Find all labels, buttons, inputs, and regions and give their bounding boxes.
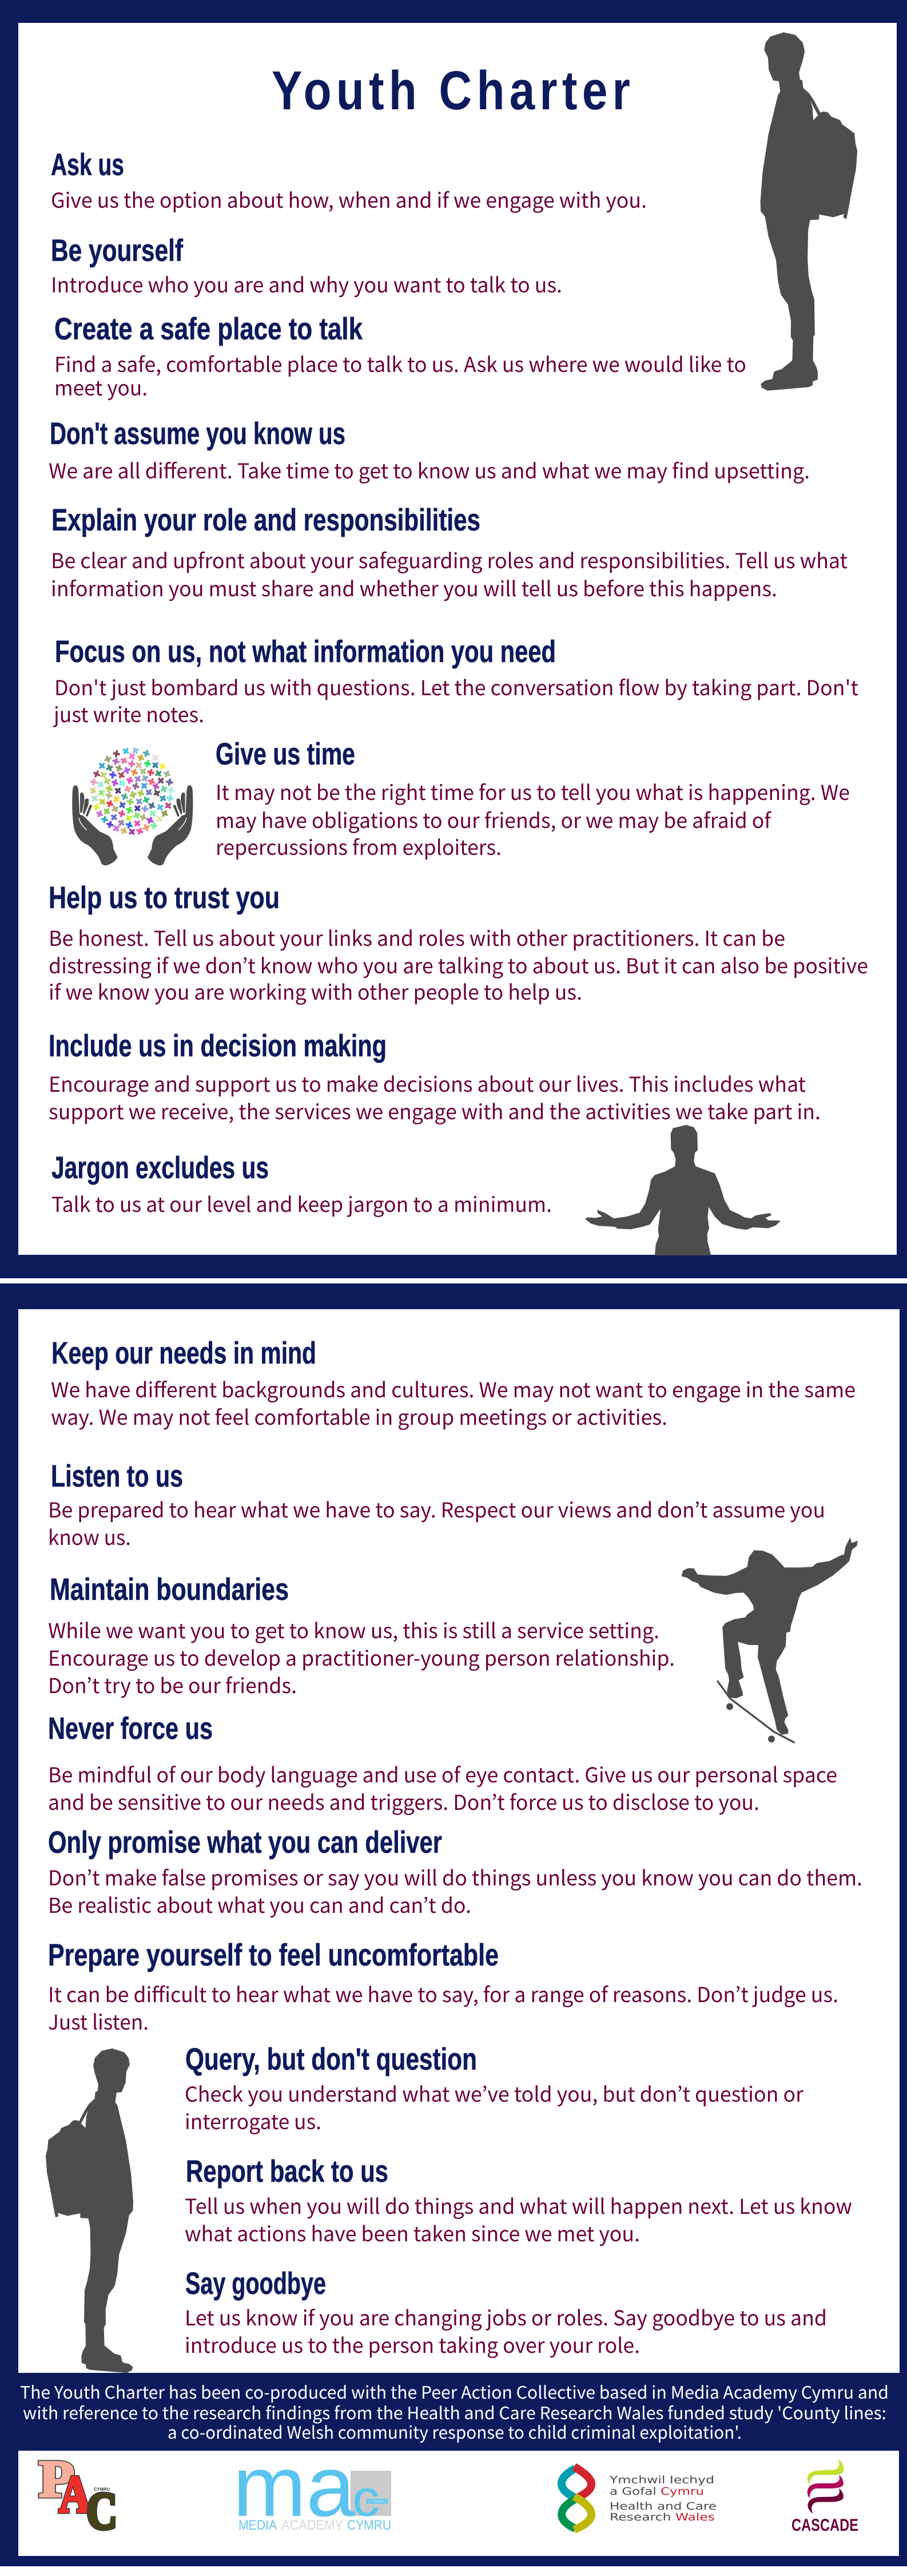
section: Be yourself [51,233,562,299]
logo: Media Academy Cymru: c [352,2470,380,2527]
logo: Media Academy Cymru: CYMRU [368,2499,387,2504]
section: Don't assume you know us: Don't assume you know us [50,417,345,451]
section: Maintain boundaries: Encourage us to develop a practitioner-young person relationship. [48,1642,675,1672]
section: Only promise what you can deliver: Only promise what you can deliver [48,1825,442,1860]
section: Give us time: It may not be the right time for us to tell you what is happening. We [216,776,850,806]
section: Listen to us [48,1459,825,1551]
section: Prepare yourself to feel uncomfortable: Prepare yourself to feel uncomfortable [48,1938,499,1972]
logo: CASCADE: CASCADE [791,2516,858,2535]
section: Be yourself: Introduce who you are and why you want to talk to us. [51,269,562,299]
section: Help us to trust you: if we know you are working with other people to help us. [49,976,582,1006]
footer credit text: a co-ordinated Welsh community response to child criminal exploitation'. [168,2419,742,2444]
section: Say goodbye: Say goodbye [185,2266,326,2301]
section: Query, but don't question: Check you understand what we’ve told you, but don’t question or [185,2078,804,2108]
section: Explain your role and responsibilities [51,503,848,603]
section: Keep our needs in mind [51,1336,856,1431]
section: Maintain boundaries: While we want you to get to know us, this is still a service setting. [48,1615,659,1644]
logo: Health and Care Research Wales: Health and Care [610,2500,717,2512]
icon: skateboarder silhouette [682,1537,858,1742]
logo: PAC Cymru: P [39,2450,74,2508]
section: Create a safe place to talk [54,312,746,402]
logo: PAC Cymru: C [86,2482,117,2540]
section: Ask us: Ask us [51,148,124,182]
section: Never force us: and be sensitive to our needs and triggers. Don’t force us to disclose to you. [48,1786,759,1816]
logo: Health and Care Research Wales: a Gofal Cymru [610,2486,704,2498]
section: Maintain boundaries: Maintain boundaries [50,1572,289,1607]
section: Listen to us: Listen to us [51,1459,183,1493]
section: Say goodbye [185,2266,827,2359]
section: Prepare yourself to feel uncomfortable: It can be difficult to hear what we have to say, for a range of reasons. Don’t judge us. [48,1979,838,2008]
section: Report back to us [185,2154,852,2248]
section: Never force us: Be mindful of our body language and use of eye contact. Give us our personal space [48,1759,837,1789]
icon: person with open arms silhouette [585,1125,781,1255]
section: Say goodbye: introduce us to the person taking over your role. [185,2329,640,2359]
section: Include us in decision making: Include us in decision making [49,1029,387,1063]
icon: student with backpack silhouette, facing right [46,2048,133,2373]
section: Only promise what you can deliver: Don’t make false promises or say you will do things unless you know you can do them. [48,1862,862,1892]
section: Give us time: Give us time [216,737,355,771]
section: Report back to us: what actions have been taken since we met you. [185,2218,640,2248]
section: Focus on us, not what information you need [53,635,858,728]
section: Say goodbye: Let us know if you are changing jobs or roles. Say goodbye to us and [185,2302,827,2332]
section: Help us to trust you: Help us to trust you [49,881,280,915]
title: Youth Charter [272,60,635,121]
section: Don't assume you know us: We are all different. Take time to get to know us and what we may find upsetting. [49,455,810,485]
logo: CASCADE [791,2459,858,2535]
section: Maintain boundaries: Don’t try to be our friends. [48,1670,297,1699]
section: Be yourself: Be yourself [51,233,184,268]
section: Focus on us, not what information you need: Focus on us, not what information you need [55,635,556,669]
section: Give us time: may have obligations to our friends, or we may be afraid of [216,804,771,834]
section: Give us time [216,737,850,861]
section: Jargon excludes us: Talk to us at our level and keep jargon to a minimum. [51,1188,552,1218]
section: Give us time: repercussions from exploiters. [216,831,502,861]
panel: page two frame [0,1283,907,2566]
section: Maintain boundaries [48,1572,675,1699]
section: Never force us [48,1711,837,1816]
section: Keep our needs in mind: Keep our needs in mind [51,1336,316,1370]
section: Help us to trust you: distressing if we don’t know who you are talking to about us. But it can also be positive [49,950,868,980]
section: Listen to us: know us. [48,1521,131,1551]
section: Explain your role and responsibilities: Explain your role and responsibilities [51,503,480,537]
logo: Health and Care Research Wales: Research Wales [610,2511,715,2523]
section: Create a safe place to talk: meet you. [54,372,148,402]
section: Ask us [51,148,647,214]
section: Focus on us, not what information you need: just write notes. [53,699,204,728]
logo: Health and Care Research Wales [562,2467,717,2530]
footer credit text: with reference to the research findings from the Health and Care Research Wales funded study 'County lines: [23,2399,886,2424]
icon: hands holding puzzle globe [72,747,193,865]
footer credit text [20,2379,889,2444]
logo: PAC Cymru: C [86,2482,117,2540]
section: Prepare yourself to feel uncomfortable: Just listen. [48,2006,149,2036]
logo: PAC Cymru: P [39,2450,74,2508]
section: Help us to trust you: Be honest. Tell us about your links and roles with other practitioners. It can be [49,922,785,952]
logo: PAC Cymru [39,2450,117,2540]
section: Help us to trust you [49,881,868,1006]
logo: Media Academy Cymru: CYMRU [347,2518,391,2533]
section: Jargon excludes us [51,1151,552,1218]
section: Include us in decision making [49,1029,821,1125]
logo: PAC Cymru: A [59,2465,91,2523]
logo: PAC Cymru: CYMRU [94,2487,110,2492]
section: Keep our needs in mind: way. We may not feel comfortable in group meetings or activities. [51,1401,667,1431]
logo: Health and Care Research Wales: Ymchwil Iechyd [609,2474,714,2486]
section: Report back to us: Tell us when you will do things and what will happen next. Let us know [185,2190,852,2220]
logo: Media Academy Cymru: ma [233,2438,356,2534]
section: Report back to us: Report back to us [186,2154,388,2189]
section: Include us in decision making: Encourage and support us to make decisions about our lives. This includes what [49,1068,806,1098]
section: Include us in decision making: support we receive, the services we engage with and the activities we take part in. [49,1096,821,1125]
section: Listen to us: Be prepared to hear what we have to say. Respect our views and don’t assume you [48,1494,825,1524]
section: Jargon excludes us: Jargon excludes us [51,1151,269,1185]
footer credit text: The Youth Charter has been co-produced with the Peer Action Collective based in Media Academy Cymru and [20,2379,889,2404]
logo: Media Academy Cymru: ACADEMY [281,2518,343,2533]
section: Keep our needs in mind: We have different backgrounds and cultures. We may not want to engage in the same [51,1374,856,1404]
section: Don't assume you know us [49,417,810,485]
section: Ask us: Give us the option about how, when and if we engage with you. [51,184,647,214]
section: Create a safe place to talk: Create a safe place to talk [54,312,363,346]
panel: page one frame [0,0,907,1278]
logo: Media Academy Cymru: MEDIA [238,2518,277,2533]
section: Focus on us, not what information you need: Don't just bombard us with questions. Let the conversation flow by taking part. Don't [54,672,858,702]
section: Query, but don't question [185,2042,804,2135]
section: Never force us: Never force us [48,1711,213,1746]
section: Explain your role and responsibilities: information you must share and whether you will tell us before this happens. [51,573,777,603]
section: Only promise what you can deliver: Be realistic about what you can and can’t do. [48,1889,471,1919]
section: Only promise what you can deliver [48,1825,862,1919]
section: Prepare yourself to feel uncomfortable [48,1938,838,2036]
section: Query, but don't question: interrogate us. [185,2106,321,2135]
section: Query, but don't question: Query, but don't question [185,2042,477,2076]
section: Create a safe place to talk: Find a safe, comfortable place to talk to us. Ask us where we would like to [54,348,746,378]
logo: PAC Cymru: A [59,2465,91,2523]
icon: student with backpack silhouette [761,32,857,391]
section: Explain your role and responsibilities: Be clear and upfront about your safeguarding roles and responsibilities. Tell us what [51,545,848,574]
